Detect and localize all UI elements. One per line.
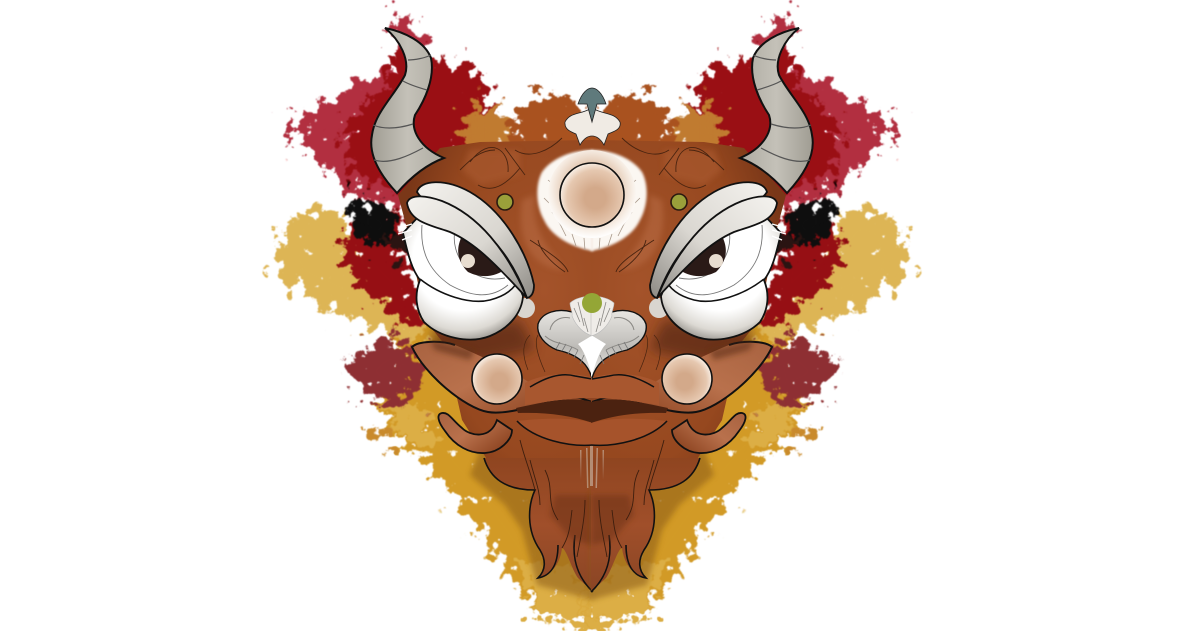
top ornament [565, 88, 620, 145]
nose [538, 293, 646, 378]
forehead fur and disc [537, 150, 647, 251]
mask, right half [590, 28, 813, 600]
mask, left half [371, 28, 594, 600]
ink splatter background, right [584, 10, 912, 631]
ink splatter background, left [272, 10, 600, 631]
